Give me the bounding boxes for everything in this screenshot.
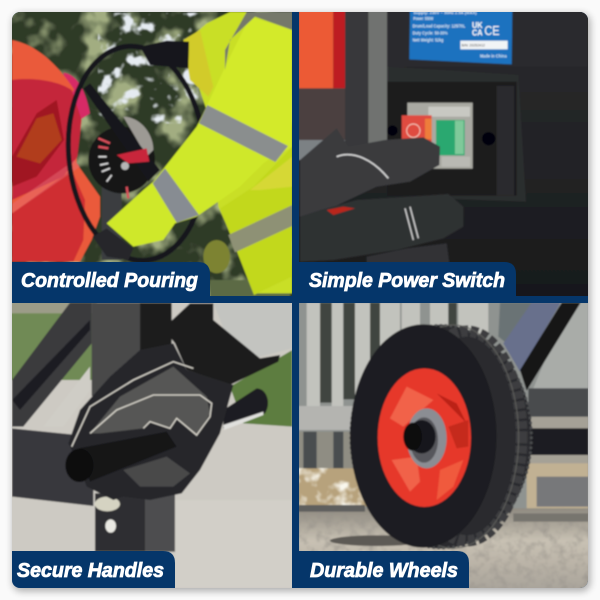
switch [407, 103, 473, 169]
glove [68, 343, 233, 500]
wrist cuff [163, 303, 280, 385]
rating label: Power: 550W [413, 16, 434, 21]
rating label: Nett Weight: 52kg [413, 38, 444, 43]
tilt wheel [64, 43, 201, 262]
rating label: Made in China [480, 54, 507, 59]
label: simple power switch [292, 262, 516, 296]
glove lower [93, 228, 133, 260]
sleeve [213, 303, 292, 358]
rating label: B/N: 20252412 [462, 42, 486, 47]
rating label: UK [472, 21, 483, 30]
wheel face [350, 324, 497, 548]
rating label: Supply: 230V ~ 50Hz 2.5A (MAX) [413, 10, 477, 15]
rating label: CE [484, 23, 500, 38]
column [345, 10, 388, 150]
label: simple power switch: Simple Power Switch [309, 270, 505, 292]
panel: controlled pouring [10, 10, 293, 300]
photo: gloved hand on handle [10, 300, 293, 590]
wheel tread [429, 324, 532, 550]
label: secure handles: Secure Handles [17, 560, 164, 582]
glove fingers [300, 128, 440, 217]
glove upper [140, 41, 189, 68]
frame legs [503, 303, 561, 372]
label: durable wheels [292, 551, 469, 588]
label: secure handles [12, 551, 175, 588]
rating label: Duty Cycle: 50-30% [413, 31, 448, 36]
photo: wheel [298, 300, 592, 590]
photo: power switch [298, 10, 592, 300]
label: controlled pouring [12, 262, 210, 296]
frame [12, 303, 92, 427]
label: controlled pouring: Controlled Pouring [21, 270, 198, 292]
reflective stripes [199, 105, 288, 162]
mixer drum [63, 73, 90, 120]
panel: secure handles [10, 300, 293, 590]
photo: mixer wheel and worker [10, 10, 293, 300]
switch housing [452, 114, 526, 202]
metal disc [407, 408, 447, 468]
rating label: CA [472, 28, 483, 37]
handle near end [78, 432, 177, 482]
label: durable wheels: Durable Wheels [310, 560, 458, 582]
sleeve [106, 112, 267, 248]
red hub [378, 368, 471, 507]
rating label [409, 10, 512, 64]
axle [412, 420, 436, 454]
jacket body [196, 12, 292, 295]
panel: simple power switch [298, 10, 592, 300]
handle far end [223, 388, 268, 428]
ground [298, 508, 592, 590]
rating label: Drum/Load Capacity: 125/70L [413, 24, 466, 29]
panel: durable wheels [298, 300, 592, 590]
